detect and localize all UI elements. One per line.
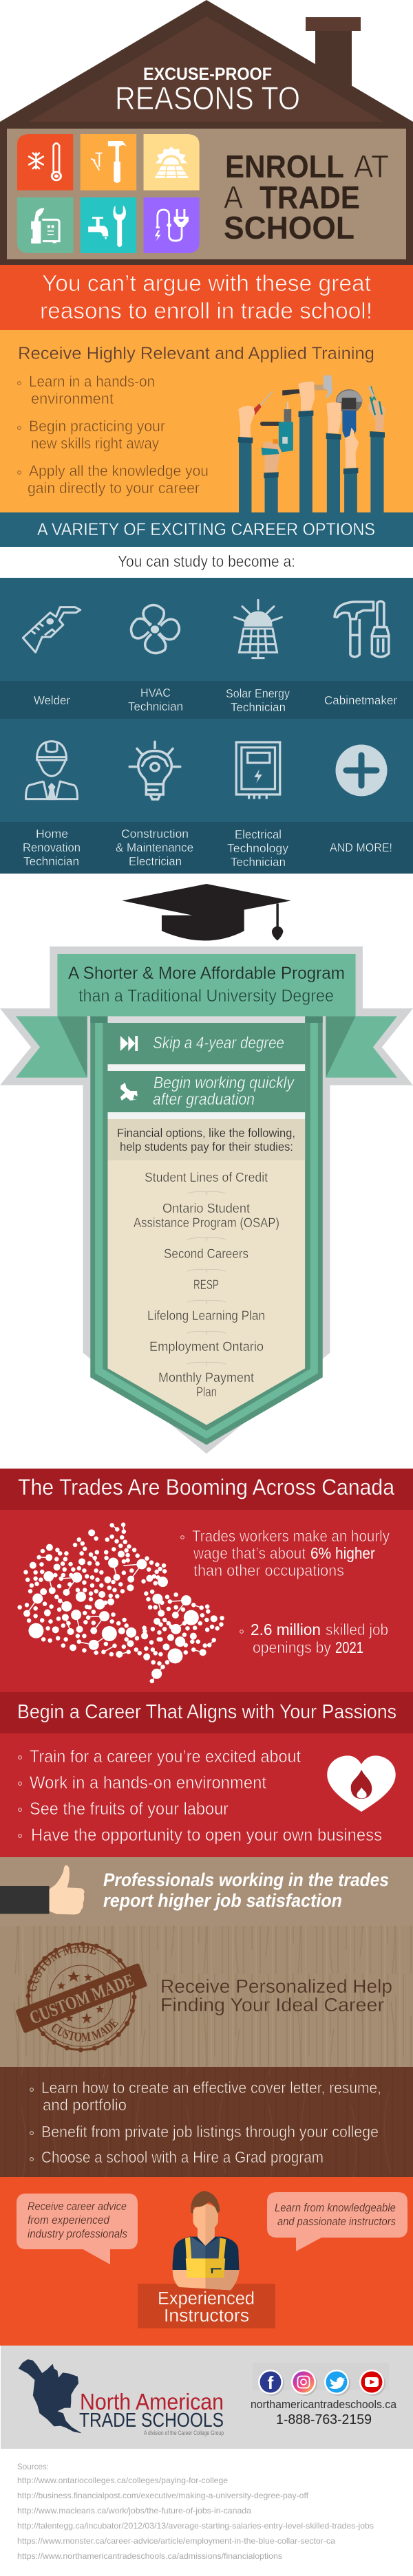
heading: career options: A VARIETY OF EXCITING CAREER OPTIONS: [37, 520, 375, 539]
icon: worker with hard hat: [25, 742, 77, 799]
sources: http://www.macleans.ca/work/jobs/the-future-of-jobs-in-canada: [17, 2506, 251, 2515]
label: home renovation technician: Renovation: [23, 841, 81, 854]
arm pointing: [343, 428, 359, 512]
career: welder: [23, 607, 81, 707]
label: solar energy technician: [226, 686, 290, 714]
bullet list: training: Apply all the knowledge you: [29, 462, 209, 479]
logo wordmark: North American: [80, 2389, 224, 2414]
panel: orange intro band: [0, 265, 413, 330]
icon tile: plumbing wrench and faucet: [81, 197, 136, 253]
text: financial options intro: [117, 1126, 295, 1154]
label: construction and maintenance electrician: Construction: [121, 827, 189, 841]
icon: instagram: [291, 2370, 317, 2396]
stamp banner: [15, 1963, 147, 2033]
arm with drill: [260, 402, 293, 512]
map: dotted canada: [20, 1525, 222, 1681]
title: enroll at a trade school: [224, 149, 389, 246]
icon: plus: [336, 744, 387, 797]
banner body layers: [90, 1016, 323, 1445]
icon tile: generator: [17, 197, 73, 253]
stat: hourly wage: Trades workers make an hourly: [192, 1527, 390, 1545]
stamp arc text bottom: CUSTOM MADE: [52, 2018, 118, 2042]
panel: experienced instructors: [0, 2177, 413, 2346]
label: construction and maintenance electrician: Electrician: [129, 854, 182, 868]
arm with screwdriver: [238, 391, 273, 512]
icon: custom made stamp: [16, 1941, 147, 2053]
list: financial options: RESP: [193, 1278, 219, 1292]
text: begin working quickly: [153, 1074, 295, 1109]
panel: trades booming across canada: [0, 1469, 413, 1692]
banner top heading box: [57, 954, 356, 1016]
bullet list: passions: Have the opportunity to open your own business: [31, 1826, 382, 1845]
bullet list: training: gain directly to your career: [28, 479, 200, 497]
bullet list: training: Learn in a hands-on: [29, 373, 155, 390]
intro text: [40, 270, 372, 323]
label: hvac technician: Technician: [128, 700, 183, 713]
logo: north american trade schools: [19, 2359, 224, 2436]
heading: applied training: Receive Highly Relevant and Applied Training: [18, 344, 374, 363]
stat: hourly wage: [181, 1527, 390, 1579]
list: financial options: Plan: [196, 1385, 217, 1400]
label: cabinetmaker: Cabinetmaker: [324, 693, 397, 707]
sources: http://business.financialpost.com/executive/making-a-university-degree-pay-off: [17, 2491, 309, 2500]
title: enroll at a trade school: SCHOOL: [224, 210, 354, 246]
label: electrical technology technician: Technology: [227, 841, 288, 855]
text: begin working quickly: Begin working quickly: [153, 1074, 295, 1092]
box: experienced instructors label: [138, 2284, 275, 2328]
contact details: 1-888-763-2159: [276, 2412, 372, 2427]
heading: shorter program: than a Traditional University Degree: [78, 986, 334, 1006]
heading: shorter program: A Shorter & More Affordable Program: [68, 964, 345, 983]
title: excuse-proof reasons to: REASONS TO: [115, 80, 300, 116]
list: financial options: Lifelong Learning Plan: [147, 1309, 265, 1323]
icon: lightbulb with gear: [129, 742, 180, 799]
logo map: [19, 2359, 82, 2433]
speech bubble: knowledgeable instructors: Learn from knowledgeable: [275, 2202, 396, 2214]
heading: personalized help: Receive Personalized Help: [160, 1976, 392, 1997]
bullet list: passions: Train for a career you’re excited about: [30, 1747, 301, 1766]
text: job satisfaction: Professionals working in the trades: [103, 1870, 389, 1890]
list: financial options: Monthly Payment: [158, 1371, 255, 1385]
text: job satisfaction: report higher job satisfaction: [103, 1890, 342, 1911]
bullet list: career help: [30, 2079, 381, 2166]
panel: personalized career help: [0, 1926, 413, 2067]
bullet list: training: [18, 373, 209, 497]
bullet list: career help: Benefit from private job listings through your college: [41, 2123, 379, 2141]
text: experienced instructors: [158, 2289, 255, 2326]
sources: https://www.northamericantradeschools.ca/admissions/financialoptions: [17, 2551, 282, 2561]
stat: hourly wage: than other occupations: [193, 1561, 344, 1579]
panel: career aligned with passions: [0, 1692, 413, 1857]
bullet list: passions: [19, 1747, 382, 1845]
intro text: reasons to enroll in trade school!: [40, 298, 372, 323]
label: solar energy technician: Technician: [231, 700, 286, 714]
label: solar energy technician: Solar Energy: [226, 686, 290, 700]
heading: shorter program: [68, 964, 345, 1006]
stat: job openings: 2021: [335, 1638, 363, 1656]
icon: solar panel: [235, 600, 282, 658]
text: financial options intro: Financial options, like the following,: [117, 1126, 295, 1140]
career: hvac technician: [128, 605, 183, 713]
icon: fast forward: [120, 1036, 138, 1051]
panel: applied training: [0, 330, 413, 512]
text: begin working quickly: after graduation: [153, 1090, 255, 1109]
speech bubble: career advice: Receive career advice: [28, 2200, 127, 2213]
text: skip a 4-year degree: Skip a 4-year degree: [153, 1034, 284, 1052]
label: home renovation technician: Home: [36, 827, 68, 841]
title: enroll at a trade school: AT: [354, 149, 389, 184]
label: hvac technician: HVAC: [140, 686, 171, 700]
label: electrical technology technician: Electrical: [235, 827, 282, 841]
stat: hourly wage: wage that’s about: [193, 1544, 306, 1562]
speech bubble: career advice: [17, 2194, 138, 2264]
label: construction and maintenance electrician: & Maintenance: [116, 841, 193, 854]
career: construction and maintenance electrician: [116, 742, 193, 868]
title: enroll at a trade school: TRADE: [260, 180, 360, 215]
list: financial options: Employment Ontario: [149, 1340, 264, 1354]
stat: hourly wage: 6% higher: [310, 1544, 375, 1562]
label: welder: Welder: [34, 693, 70, 707]
label: electrical technology technician: [227, 827, 288, 869]
icon: graduation cap: [122, 884, 291, 940]
speech bubble: knowledgeable instructors: [267, 2192, 407, 2251]
ribbon green tails: [16, 1016, 397, 1078]
text: job satisfaction: [103, 1870, 389, 1911]
panel: shorter and more affordable program: [0, 884, 413, 1453]
illustration: raised arms holding tools: [238, 376, 385, 512]
contact details: northamericantradeschools.ca: [251, 2398, 397, 2411]
stamp arc text top: CUSTOM MADE: [27, 1942, 96, 1992]
panel: career help list: [0, 2067, 413, 2177]
speech bubble: career advice: industry professionals: [28, 2228, 127, 2240]
icon tile: hammer and nails: [81, 134, 136, 191]
label: home renovation technician: Technician: [23, 854, 79, 868]
social icons: [253, 2363, 389, 2396]
icon: thumbs up: [0, 1865, 85, 1914]
list: financial options: Assistance Program (OSAP): [134, 1216, 279, 1231]
panel: job satisfaction: [0, 1857, 413, 1926]
stat: job openings: openings by: [253, 1638, 331, 1656]
roof and chimney: [0, 0, 413, 131]
house body: [0, 122, 413, 265]
career: electrical technology technician: [227, 742, 288, 869]
title: excuse-proof reasons to: EXCUSE-PROOF: [143, 65, 272, 84]
subheading: you can study: You can study to become a:: [118, 552, 295, 570]
title: excuse-proof reasons to: [115, 65, 300, 116]
speech bubble: career advice: from experienced: [28, 2214, 110, 2227]
icon: hammer and screwdriver: [335, 601, 389, 657]
icon: facebook: [258, 2370, 284, 2396]
icon: twitter: [324, 2370, 350, 2396]
label: electrical technology technician: Technician: [231, 855, 286, 869]
arm with grinder: [326, 389, 363, 512]
icon tile: hvac thermometer: [17, 134, 73, 191]
icon: welding torch: [23, 607, 81, 652]
bullet list: passions: See the fruits of your labour: [30, 1799, 229, 1819]
bullet list: training: environment: [31, 390, 114, 407]
bullet list: training: new skills right away: [31, 435, 160, 452]
panel: house header: [0, 0, 413, 265]
icon tiles: [17, 134, 200, 253]
arm with pliers: [368, 387, 385, 512]
icon: facebook: f: [268, 2372, 274, 2393]
intro text: You can’t argue with these great: [42, 270, 371, 296]
icon: electrical panel: [236, 742, 280, 799]
logo wordmark: TRADE SCHOOLS: [79, 2410, 224, 2432]
sources: http://talentegg.ca/incubator/2012/03/13/average-starting-salaries-entry-level-skilled-trades-jobs: [17, 2521, 374, 2531]
list: financial options: Ontario Student: [162, 1202, 251, 1216]
panel: career options: [0, 512, 413, 874]
sources: Sources:: [17, 2462, 49, 2471]
text: experienced instructors: Experienced: [158, 2289, 255, 2308]
career: and more: [330, 744, 392, 854]
logo wordmark: A division of the Career College Group: [144, 2429, 224, 2436]
icon: heart with flame: [327, 1755, 396, 1812]
bullet list: career help: and portfolio: [43, 2096, 127, 2114]
sources: http://www.ontariocolleges.ca/colleges/paying-for-college: [17, 2476, 228, 2485]
bullet list: passions: Work in a hands-on environment: [30, 1773, 266, 1793]
title: enroll at a trade school: A: [224, 180, 243, 215]
list: financial options: Student Lines of Credit: [145, 1171, 268, 1185]
icon: youtube: [359, 2370, 385, 2396]
stat: job openings: skilled job: [326, 1621, 388, 1638]
logo wordmark: [79, 2389, 224, 2436]
label: and more: AND MORE!: [330, 841, 392, 854]
heading: personalized help: [160, 1976, 392, 2015]
label: home renovation technician: [23, 827, 81, 868]
label: hvac technician: [128, 686, 183, 713]
ribbon banner: [0, 946, 413, 1453]
arm with hammer: [282, 376, 332, 512]
speech bubble: knowledgeable instructors: and passionate instructors: [277, 2216, 396, 2228]
stat: job openings: 2.6 million: [251, 1621, 321, 1638]
list: financial options: Second Careers: [164, 1247, 248, 1262]
ribbon grey backing: [0, 946, 413, 1453]
icon: fan: [131, 605, 179, 653]
sources: [17, 2462, 374, 2561]
list: financial options: [134, 1171, 279, 1400]
bullet list: career help: Learn how to create an effective cover letter, resume,: [41, 2079, 381, 2097]
stamp banner: CUSTOM MADE: [27, 1969, 137, 2028]
text: experienced instructors: Instructors: [164, 2306, 249, 2326]
stamp stars: [57, 1971, 104, 2024]
heading: trades booming: The Trades Are Booming Across Canada: [18, 1475, 394, 1500]
contact details: [251, 2398, 397, 2427]
text: financial options intro: help students pay for their studies:: [120, 1140, 293, 1154]
panel: footer contact: [1, 2346, 413, 2449]
label: construction and maintenance electrician: [116, 827, 193, 868]
icon tile: electrical plug: [144, 197, 200, 253]
stat: job openings: [240, 1621, 388, 1656]
icon: crossed wrench: [120, 1083, 138, 1101]
career: cabinetmaker: [324, 601, 397, 707]
heading: personalized help: Finding Your Ideal Career: [160, 1994, 384, 2015]
bullet list: training: Begin practicing your: [29, 418, 165, 435]
sources: https://www.monster.ca/career-advice/article/employment-in-the-blue-collar-sector-ca: [17, 2536, 335, 2546]
illustration: instructor: [173, 2191, 239, 2290]
icon tile: solar sun: [144, 134, 200, 191]
bullet list: career help: Choose a school with a Hire a Grad program: [41, 2148, 324, 2166]
title: enroll at a trade school: ENROLL: [225, 149, 344, 184]
career: solar energy technician: [226, 600, 290, 714]
career: home renovation technician: [23, 742, 81, 868]
